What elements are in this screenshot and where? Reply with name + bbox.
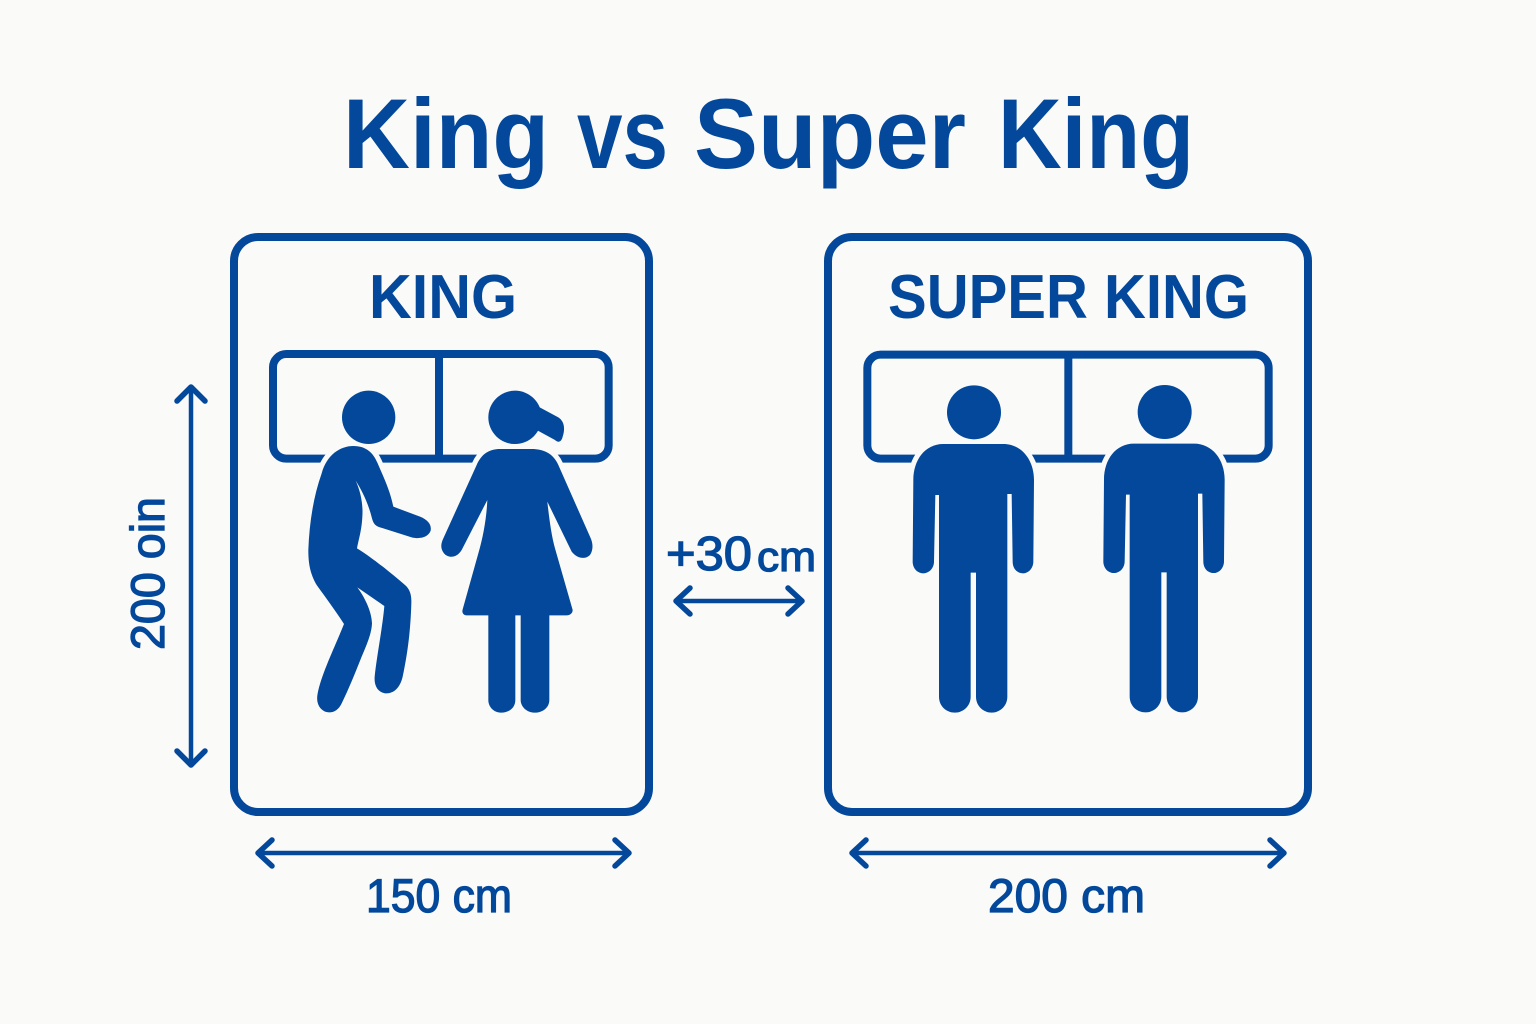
king pillows: [273, 354, 609, 459]
arrow: king width: [258, 840, 629, 866]
title: vs: [577, 78, 668, 189]
super king mattress outline: [828, 237, 1308, 812]
label: width difference: [666, 528, 816, 581]
icon: standing man right: [1103, 385, 1225, 712]
icon: standing man left: [913, 385, 1034, 713]
arrow: width difference: [676, 588, 802, 614]
title: King: [998, 78, 1194, 189]
heading: super king: SUPER KING: [888, 263, 1249, 332]
super king pillows and sleepers: [867, 355, 1269, 713]
label: super king width: 200 cm: [988, 869, 1145, 922]
super king pillows: [867, 355, 1269, 459]
title: King: [343, 78, 549, 189]
panel: king bed: [234, 237, 649, 812]
king mattress outline: [234, 237, 649, 812]
label: width difference: cm: [757, 533, 816, 580]
icon: woman in a dress with ponytail: [441, 391, 592, 713]
panel: super king bed: [828, 237, 1308, 812]
label: king length: 200 oin: [121, 497, 174, 650]
label: king width: 150 cm: [366, 869, 512, 922]
heading: king: KING: [369, 263, 517, 332]
label: width difference: +30: [666, 528, 752, 581]
title: Super: [694, 78, 966, 189]
icon: man sleeping in a bent pose: [308, 391, 431, 712]
arrow: super king width: [852, 840, 1284, 866]
arrow: king length: [177, 387, 205, 765]
king pillows and sleepers: [273, 354, 609, 713]
title: [343, 78, 1194, 189]
